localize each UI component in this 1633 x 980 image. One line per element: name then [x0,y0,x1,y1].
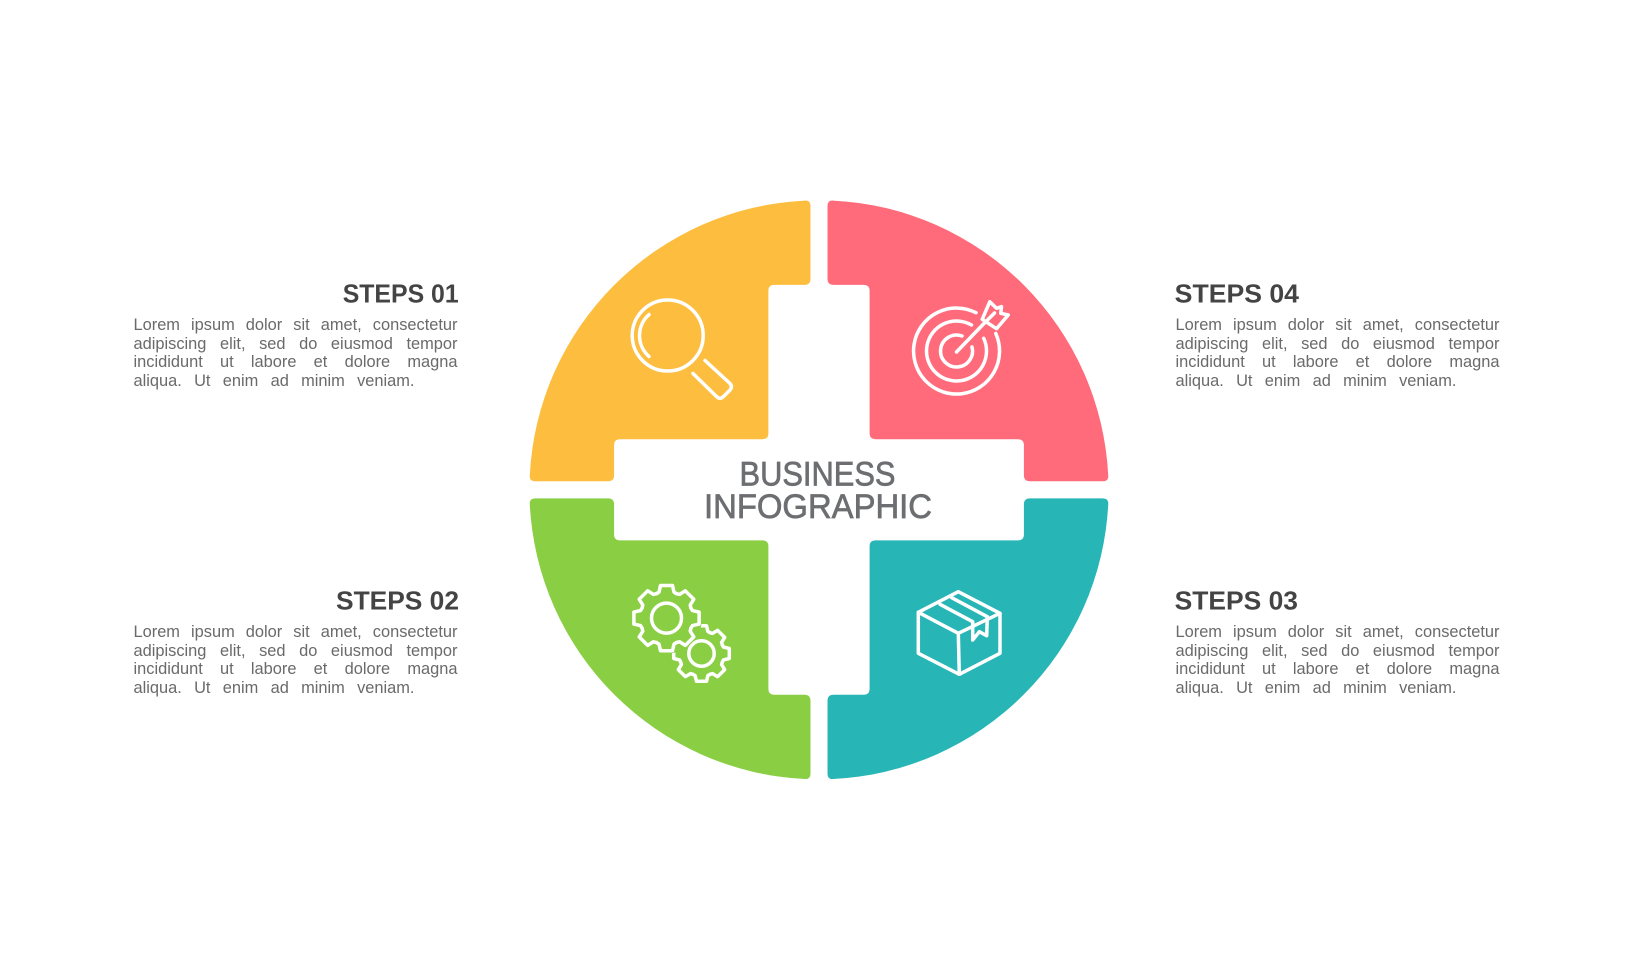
icon: magnifying glass [632,300,731,398]
center title [704,456,932,526]
text block: steps 04 [1176,316,1500,390]
panel: yellow quadrant [530,201,810,481]
center title: BUSINESS [740,456,896,494]
heading: steps 01: STEPS 01 [343,279,459,309]
text block: steps 01 [134,316,458,390]
text block: steps 04: incididunt ut labore et dolore magna [1176,353,1500,371]
panel: green quadrant [530,498,810,779]
text block: steps 01: Lorem ipsum dolor sit amet, consectetur [134,316,458,334]
icon: target with arrow [914,302,1008,394]
heading: steps 04: STEPS 04 [1175,279,1300,309]
text block: steps 04: aliqua. Ut enim ad minim veniam. [1176,372,1456,390]
text block: steps 02: incididunt ut labore et dolore magna [134,660,458,678]
text block: steps 02 [134,623,458,697]
heading: steps 03: STEPS 03 [1175,586,1298,616]
text block: steps 03: Lorem ipsum dolor sit amet, consectetur [1176,623,1500,641]
text block: steps 04: Lorem ipsum dolor sit amet, consectetur [1176,316,1500,334]
panel: teal quadrant [828,498,1108,779]
text block: steps 01: adipiscing elit, sed do eiusmod tempor [134,335,458,353]
text block: steps 03: adipiscing elit, sed do eiusmod tempor [1176,642,1500,660]
text block: steps 03: aliqua. Ut enim ad minim veniam. [1176,679,1456,697]
heading: steps 02: STEPS 02 [336,586,459,616]
icon: gears [634,586,729,681]
text block: steps 02: Lorem ipsum dolor sit amet, consectetur [134,623,458,641]
text block: steps 01: aliqua. Ut enim ad minim veniam. [134,372,414,390]
text block: steps 04: adipiscing elit, sed do eiusmod tempor [1176,335,1500,353]
text block: steps 03 [1176,623,1500,697]
center title: INFOGRAPHIC [704,488,932,526]
text block: steps 03: incididunt ut labore et dolore magna [1176,660,1500,678]
text block: steps 02: adipiscing elit, sed do eiusmod tempor [134,642,458,660]
text block: steps 01: incididunt ut labore et dolore magna [134,353,458,371]
panel: red quadrant [828,201,1108,481]
icon: package box [918,592,1000,674]
text block: steps 02: aliqua. Ut enim ad minim veniam. [134,679,414,697]
